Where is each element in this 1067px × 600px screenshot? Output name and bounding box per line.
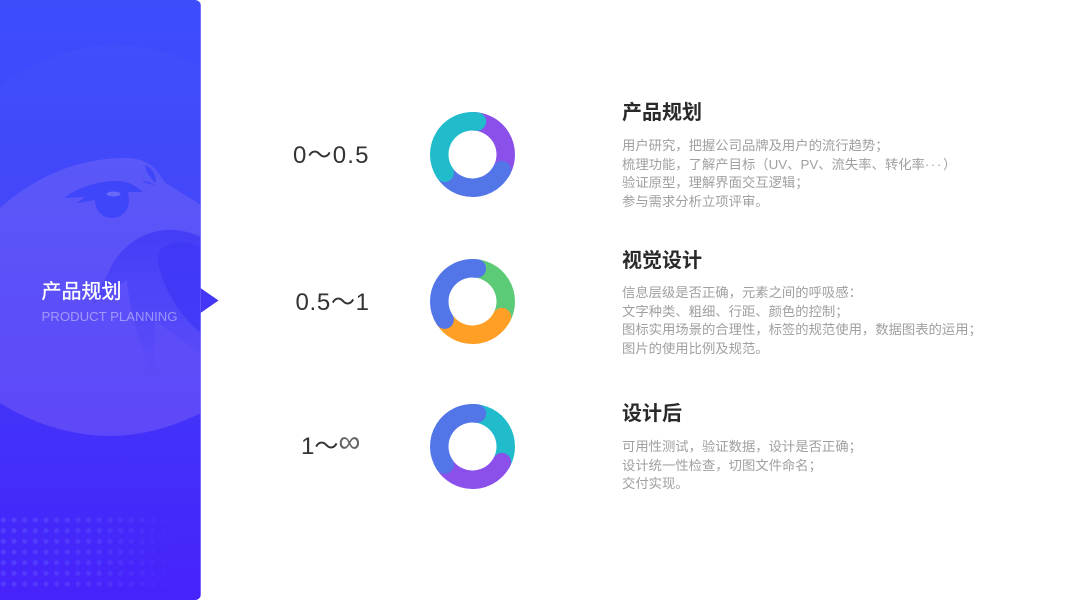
range label: 0.5 to 1: 0.5～1 bbox=[296, 289, 370, 316]
sidebar heading: 产品规划 bbox=[42, 281, 122, 303]
description: after design: 交付实现。 bbox=[622, 476, 689, 491]
sidebar subheading: PRODUCT PLANNING bbox=[42, 309, 178, 324]
description: product planning bbox=[622, 138, 956, 209]
panel: left sidebar bbox=[0, 0, 218, 600]
donut chart 3 bbox=[430, 404, 515, 489]
description: product planning: 参与需求分析立项评审。 bbox=[622, 194, 769, 209]
description: product planning: 用户研究，把握公司品牌及用户的流行趋势； bbox=[622, 138, 889, 153]
heading: product planning: 产品规划 bbox=[622, 102, 702, 124]
range label: 0 to 0.5: 0～0.5 bbox=[293, 142, 370, 169]
description: visual design bbox=[622, 285, 982, 356]
description: product planning: 验证原型，理解界面交互逻辑； bbox=[622, 175, 809, 190]
donut chart 1 bbox=[430, 112, 515, 197]
description: visual design: 文字种类、粗细、行距、颜色的控制； bbox=[622, 304, 849, 319]
description: after design: 可用性测试，验证数据，设计是否正确； bbox=[622, 439, 862, 454]
description: after design bbox=[622, 439, 862, 491]
donut chart 2 bbox=[430, 259, 515, 344]
heading: visual design: 视觉设计 bbox=[622, 250, 702, 272]
description: visual design: 图片的使用比例及规范。 bbox=[622, 341, 769, 356]
description: after design: 设计统一性检查，切图文件命名； bbox=[622, 458, 822, 473]
description: product planning: 梳理功能，了解产目标（UV、PV、流失率、转化率···） bbox=[622, 157, 956, 172]
description: visual design: 信息层级是否正确，元素之间的呼吸感： bbox=[622, 285, 862, 300]
sidebar background with eagle illustration bbox=[0, 0, 218, 600]
heading: after design: 设计后 bbox=[622, 403, 682, 425]
range label: 1 to infinity: 1～∞ bbox=[301, 424, 360, 460]
description: visual design: 图标实用场景的合理性，标签的规范使用，数据图表的运用； bbox=[622, 322, 982, 337]
